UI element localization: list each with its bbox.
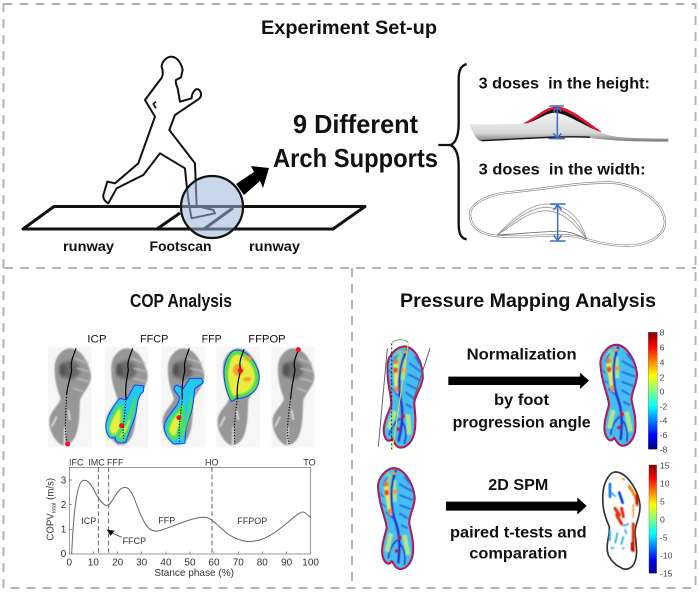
chart text: 20 (112, 557, 124, 568)
text: progression angle: progression angle (453, 414, 591, 431)
panel: COP analysis (46, 291, 319, 579)
chart text: 100 (302, 557, 319, 568)
insole side view (469, 107, 668, 142)
chart text: 3 (61, 475, 67, 486)
chart text: IMC (88, 457, 105, 467)
panel: experiment set-up (23, 18, 668, 254)
foot: before normalization (378, 340, 430, 450)
phase labels: FFP (202, 334, 222, 346)
chart text (46, 457, 319, 579)
chart text: FFP (158, 515, 175, 525)
runway (23, 206, 365, 229)
arrow to arch supports (236, 166, 269, 195)
chart text: 1 (61, 525, 67, 536)
axes (69, 467, 311, 554)
text: comparation: comparation (469, 545, 567, 562)
colorbar: SPM: 5 (660, 497, 665, 507)
width arrow (550, 204, 566, 241)
chart text: COPV (46, 513, 57, 541)
colorbar: SPM: -15 (660, 568, 673, 578)
colorbar: pressure (648, 328, 668, 454)
text: width doses: 3 doses in the width: (479, 162, 646, 179)
chart text: 30 (136, 557, 148, 568)
text: by foot: by foot (494, 392, 549, 409)
colorbar: pressure: 2 (660, 372, 665, 382)
phase labels: ICP (87, 334, 107, 346)
colorbar: pressure: 4 (660, 357, 665, 367)
chart text: 60 (208, 557, 220, 568)
runner figure (103, 57, 215, 218)
foot: final (271, 347, 315, 447)
line chart: COP velocity (46, 457, 319, 579)
colorbar: pressure: -8 (660, 444, 668, 454)
foot: FFP (161, 347, 205, 447)
arch support details (438, 64, 668, 246)
chart text: FFF (107, 457, 124, 467)
colorbar: pressure: -6 (660, 430, 668, 440)
colorbar: SPM: 0 (660, 514, 665, 524)
arrow: normalization (448, 373, 589, 389)
magnifier circle (181, 176, 243, 238)
insole top view (470, 183, 665, 246)
foot: normalized (601, 345, 637, 445)
text: normalization: Normalization (467, 346, 577, 363)
text: height doses: 3 doses in the height: (479, 76, 650, 93)
label: runway right: runway (249, 239, 301, 254)
foot: SPM result (603, 472, 640, 569)
label: runway left: runway (63, 239, 115, 254)
chart text: Stance phase (%) (154, 568, 234, 579)
phase labels: FFCP (140, 334, 168, 346)
title: pressure mapping analysis: Pressure Mapping Analysis (400, 291, 656, 312)
heading: arch supports: Arch Supports (273, 143, 438, 173)
chart text: 80 (257, 557, 268, 568)
colorbar: SPM: 10 (660, 478, 670, 488)
pressure maps group (378, 328, 673, 578)
colorbar: pressure: 8 (660, 328, 665, 338)
chart text: IFC (69, 457, 84, 467)
text: 2D SPM: 2D SPM (488, 477, 548, 494)
chart text: ICP (81, 516, 96, 526)
title: COP analysis: COP Analysis (130, 291, 232, 311)
colorbar: pressure: -4 (660, 416, 668, 426)
foot: FFPOP (216, 347, 260, 447)
chart text: 70 (233, 557, 244, 568)
colorbar: pressure: 0 (660, 387, 665, 397)
COP foot sequence (48, 334, 315, 447)
chart text: 90 (281, 557, 293, 568)
foot: ICP (48, 347, 92, 447)
label: footscan: Footscan (150, 239, 212, 254)
heading: 9 different: 9 Different (293, 109, 418, 139)
chart text: 50 (184, 557, 196, 568)
foot: FFCP (105, 347, 148, 447)
colorbar: pressure: 6 (660, 343, 665, 353)
foot: second pressure map (378, 468, 414, 569)
chart text: (m/s) (46, 478, 57, 503)
panel: pressure mapping analysis (378, 291, 673, 578)
chart text: FFCP (123, 536, 146, 546)
colorbar: SPM: -10 (660, 550, 673, 560)
brace (438, 64, 467, 239)
chart text: total (51, 503, 57, 513)
chart text: FFPOP (237, 516, 267, 526)
arrow: 2D SPM (446, 497, 587, 515)
phase labels (87, 334, 286, 346)
chart text: 0 (61, 549, 67, 560)
chart text: 40 (160, 557, 172, 568)
chart text: HO (205, 457, 218, 467)
event lines (98, 467, 212, 554)
chart text: 0 (67, 557, 73, 568)
colorbar: pressure: -2 (660, 401, 668, 411)
text: paired t-tests: paired t-tests and (450, 524, 587, 541)
phase labels: FFPOP (248, 334, 286, 346)
height arrow (548, 106, 565, 139)
FFCP pointer (107, 530, 122, 537)
title: experiment set-up: Experiment Set-up (261, 18, 437, 39)
colorbar: SPM: 15 (660, 461, 670, 471)
colorbar: SPM (649, 461, 673, 578)
COP velocity curve (72, 480, 311, 554)
chart text: 2 (61, 500, 67, 511)
chart text: TO (303, 457, 316, 467)
chart text: 10 (88, 557, 99, 568)
colorbar: SPM: -5 (660, 532, 668, 542)
